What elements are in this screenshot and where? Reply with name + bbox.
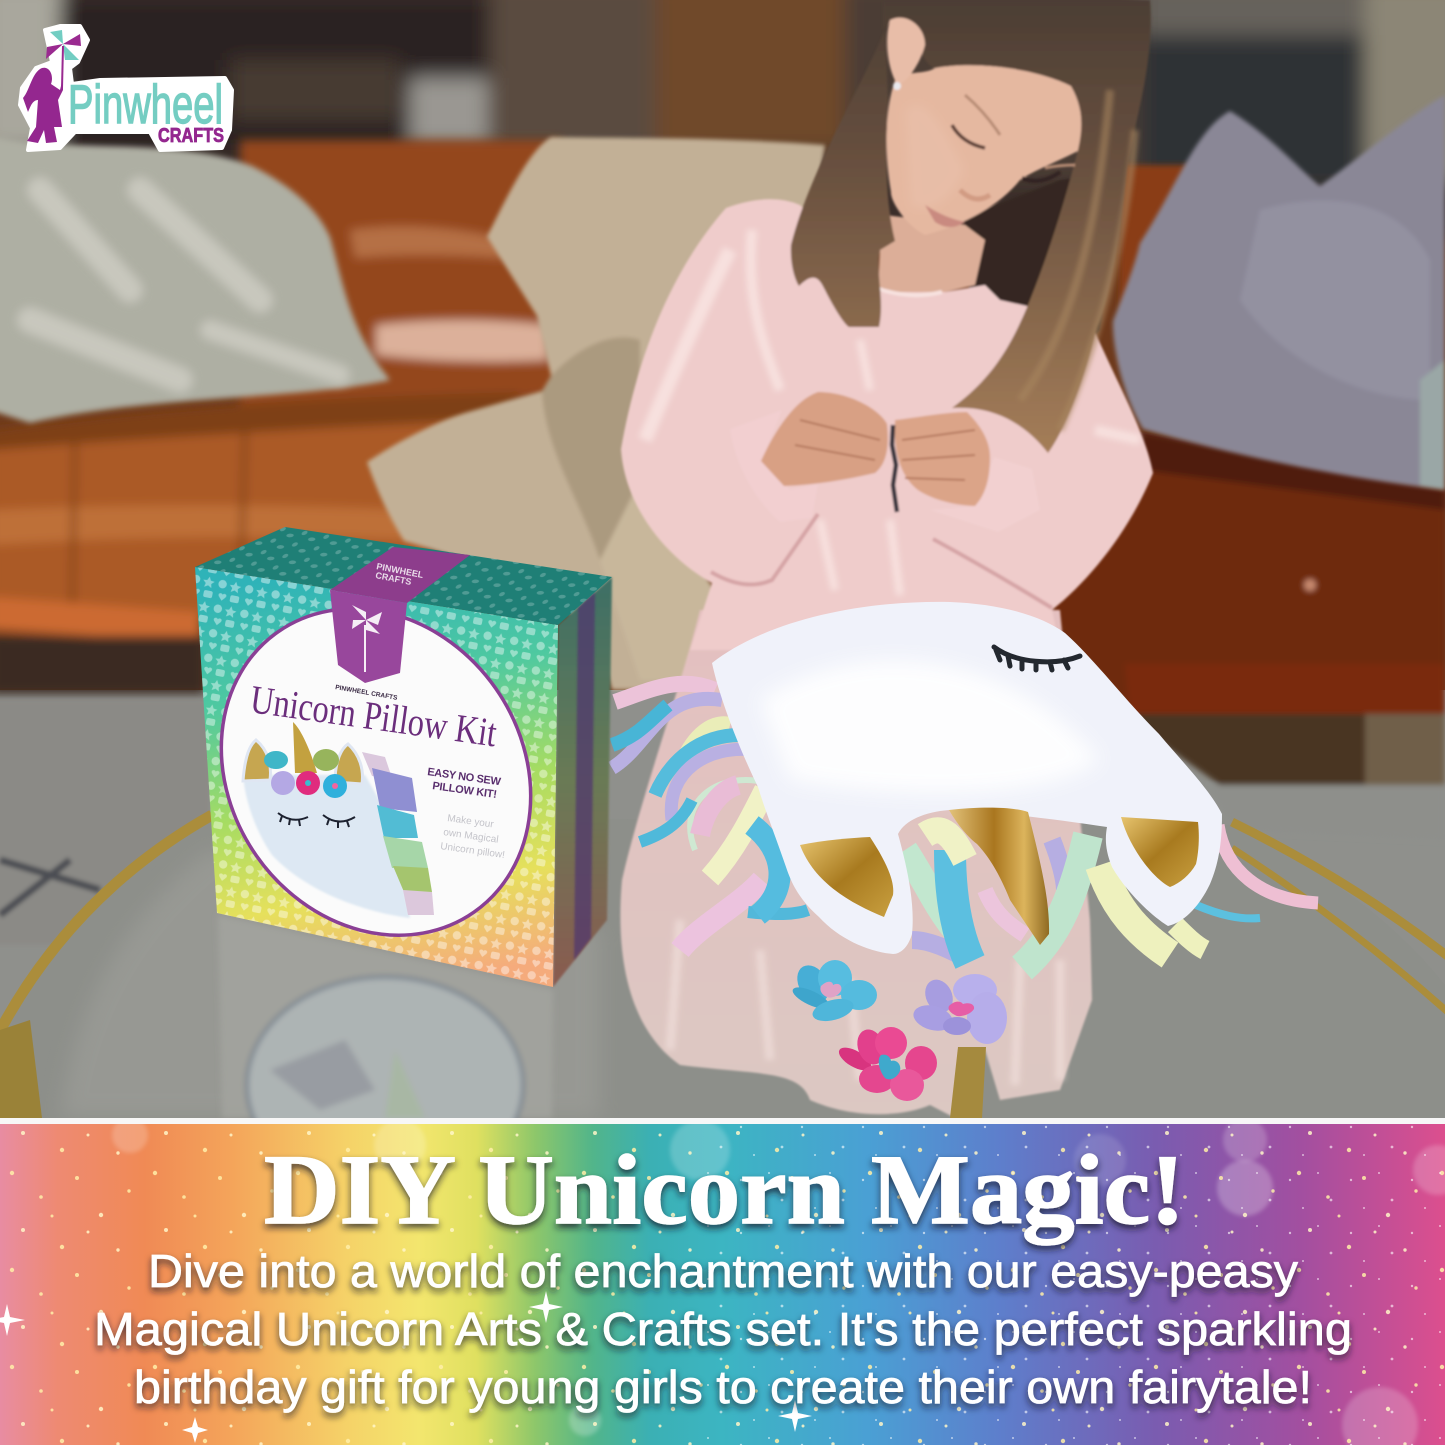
base backdrop [0,226,1445,690]
dress torso and sleeves [621,199,1153,650]
dark hair behind face [945,170,1125,400]
box eyelashes [278,813,355,828]
body line 2: Magical Unicorn Arts & Crafts set. It's the perfect sparkling [94,1303,1352,1355]
sofa right [1050,165,1445,840]
small brand on label: PINWHEEL CRAFTS [335,684,399,702]
unicorn pillow text: Unicorn pillow! [440,841,506,861]
fur pillow left [0,135,390,423]
table leg centre [950,1047,986,1118]
box rainbow mane [362,752,434,915]
rainbow banner [0,1117,1445,1445]
ear [887,18,925,84]
box floral crown [264,749,347,798]
box right ear [335,744,362,784]
nose shade [960,190,990,199]
hair top and right [883,0,1151,453]
body text [94,1245,1352,1413]
headline: DIY Unicorn Magic! [264,1134,1185,1245]
cheek shade [905,105,965,209]
glass table [0,815,1445,1118]
skirt folds [670,920,1060,1085]
box reflection [218,915,553,1193]
sticker backing [20,26,232,150]
glitter dots [0,1124,1445,1445]
needle [892,425,897,512]
eye right [1022,172,1060,181]
body line 1: Dive into a world of enchantment with our easy-peasy [148,1245,1298,1297]
right gold ear [1121,817,1199,887]
sofa left [0,140,560,694]
gold horn [949,808,1049,945]
logo sticker [20,26,232,150]
sleeve shadow right [933,539,1052,608]
fingers left [795,420,880,460]
earring [893,82,901,90]
white divider [0,1118,1445,1124]
pinwheel on tab [352,605,382,672]
hair left lock [791,30,895,327]
girl silhouette [23,68,63,143]
eye left [952,125,985,148]
sparkle stars [0,1291,812,1443]
rug on floor [0,854,104,920]
wordmark crafts: CRAFTS [158,125,224,147]
hand left [761,392,888,486]
felt flower blue [790,960,877,1025]
unicorn pillow [712,602,1222,954]
velvet highlights [645,230,1140,595]
fur highlights [30,190,340,380]
beige blanket [367,137,825,690]
neck [878,215,985,292]
felt flower pink [835,1026,937,1101]
easy no sew text: EASY NO SEW [427,766,502,788]
round label [158,548,594,996]
bokeh lights [112,1117,1445,1445]
hair strands [1020,90,1135,430]
fingers right [902,430,975,480]
mouth [925,205,965,227]
box left ear [243,740,270,781]
box unicorn horn [293,722,317,773]
box unicorn face [243,775,410,918]
left cuff [730,410,818,522]
left gold ear [800,837,893,917]
gold table rim [0,815,1445,1040]
skirt [620,610,1092,1118]
product box [158,527,612,996]
pinwheel icon [46,30,81,88]
kit title: Unicorn Pillow Kit [248,676,500,755]
box top panel [195,527,612,625]
own magical text: own Magical [443,827,499,846]
box front panel [195,567,558,987]
eyebrow [965,95,1075,168]
table leg left [0,1020,42,1118]
right cuff [930,457,1040,532]
grey cushion right [1113,95,1445,490]
purple strap on top [330,547,470,603]
ribbons behind pillow [612,684,1318,968]
girl [620,0,1153,1118]
floor and rug [0,690,1445,1019]
body line 3: birthday gift for young girls to create their own fairytale! [134,1361,1312,1413]
pillow kit text: PILLOW KIT! [432,780,498,801]
make your text: Make your [447,813,495,831]
face [886,65,1082,235]
purple front tab [330,590,407,683]
collar [876,288,942,295]
hand right [895,412,990,506]
brand line two on strap: CRAFTS [375,570,412,587]
eyelashes [994,647,1080,670]
box side panel [553,577,612,987]
sleeve shadow left [711,514,818,584]
brand on strap: PINWHEEL [376,561,425,580]
wordmark pinwheel: Pinwheel [68,73,223,135]
room background [0,0,1445,240]
felt flower purple [911,974,1007,1044]
